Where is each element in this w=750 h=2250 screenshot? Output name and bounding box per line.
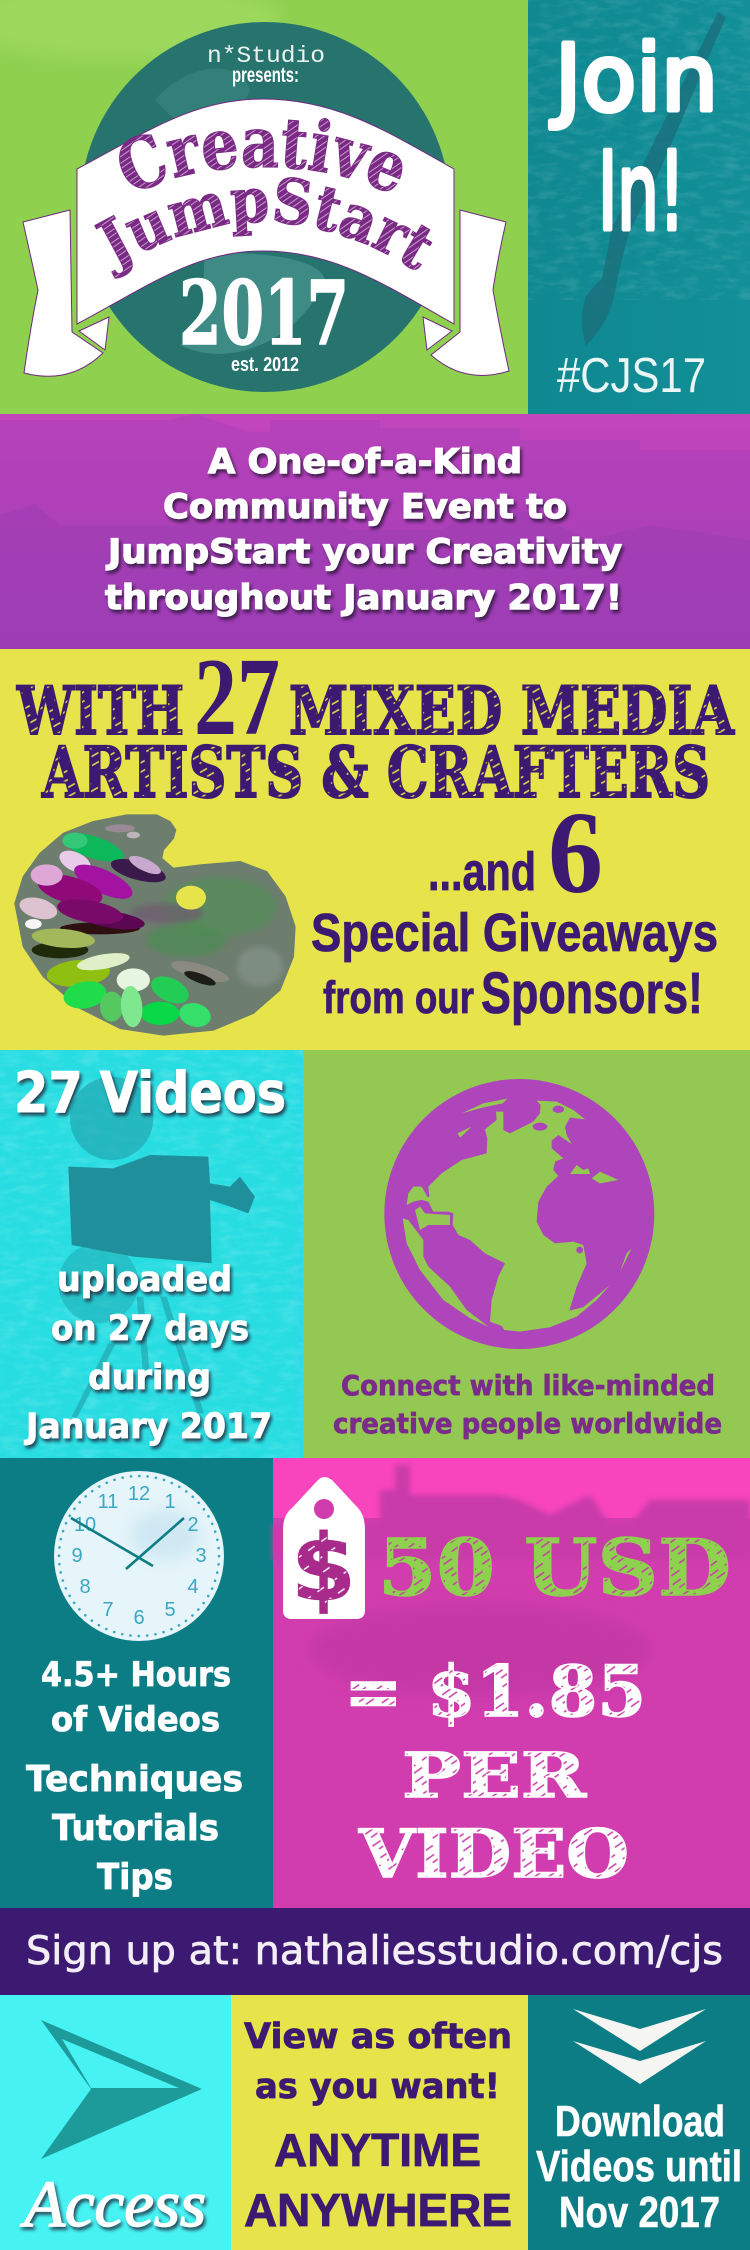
Join: Join bbox=[550, 25, 718, 132]
hours text bbox=[41, 1655, 231, 1740]
panel: logo on green bbox=[0, 0, 528, 414]
hashtag: #CJS17 bbox=[557, 349, 706, 403]
and: ...and bbox=[428, 842, 536, 902]
connect caption bbox=[333, 1369, 722, 1440]
download text: Nov 2017 bbox=[559, 2188, 720, 2237]
techniques list: Tips bbox=[97, 1857, 173, 1898]
icon: clock: 3 bbox=[195, 1545, 207, 1567]
techniques list: Tutorials bbox=[52, 1808, 219, 1849]
palette thumb hole bbox=[176, 886, 206, 910]
upload details: during bbox=[88, 1358, 211, 1398]
panel: access bbox=[0, 1995, 231, 2250]
techniques list: Techniques bbox=[26, 1759, 243, 1800]
icon: paintbrush bbox=[582, 12, 726, 346]
hours text: 4.5+ Hours bbox=[41, 1655, 231, 1695]
icon: double chevron bbox=[573, 2009, 706, 2084]
Access: Access bbox=[20, 2168, 206, 2241]
27 Videos: 27 Videos bbox=[14, 1061, 286, 1126]
icon: clock: 8 bbox=[79, 1576, 91, 1598]
globe circle bbox=[80, 22, 450, 392]
title: JumpStart: JumpStart bbox=[94, 177, 432, 279]
icon: clock: 7 bbox=[102, 1599, 114, 1621]
number 6: 6 bbox=[548, 787, 603, 918]
icon: arrow bbox=[41, 2020, 202, 2159]
icon: clock bbox=[54, 1471, 224, 1641]
est. 2012: est. 2012 bbox=[231, 354, 299, 376]
icon: clock: 6 bbox=[133, 1607, 145, 1629]
icon: clock: 11 bbox=[98, 1491, 118, 1513]
price per video: VIDEO bbox=[358, 1815, 629, 1893]
description text bbox=[105, 442, 622, 618]
n*Studio: n*Studio bbox=[207, 43, 325, 69]
icon: clock: 4 bbox=[187, 1576, 199, 1598]
icon: clock: 9 bbox=[71, 1545, 83, 1567]
banner tail left bbox=[23, 210, 103, 376]
icon: clock: 2 bbox=[187, 1514, 199, 1536]
hours text: of Videos bbox=[51, 1700, 220, 1740]
view text: as you want! bbox=[255, 2067, 500, 2107]
year 2017: 2017 bbox=[179, 261, 349, 365]
icon: clock: 12 bbox=[128, 1483, 150, 1505]
panel: Join In bbox=[528, 0, 750, 414]
techniques list bbox=[26, 1759, 243, 1898]
panel: sign up bar bbox=[0, 1908, 750, 1995]
description text: A One-of-a-Kind bbox=[208, 442, 522, 482]
view text bbox=[244, 2017, 512, 2107]
download text bbox=[536, 2097, 742, 2237]
panel: event description bbox=[0, 414, 750, 649]
panel: view as often bbox=[231, 1995, 528, 2250]
connect caption: creative people worldwide bbox=[333, 1407, 722, 1440]
icon: price tag bbox=[283, 1477, 365, 1622]
description text: Community Event to bbox=[163, 487, 567, 527]
anytime anywhere bbox=[244, 2124, 512, 2236]
panel: hours of videos bbox=[0, 1458, 273, 1908]
heading line one: WITH bbox=[16, 672, 184, 750]
price per video: PER bbox=[402, 1739, 587, 1812]
panel: download bbox=[528, 1995, 750, 2250]
banner tail right bbox=[431, 210, 509, 375]
banner fold right bbox=[423, 317, 452, 350]
icon: clock: 1 bbox=[164, 1491, 176, 1513]
upload details bbox=[24, 1260, 272, 1447]
upload details: uploaded bbox=[57, 1260, 232, 1300]
heading line one bbox=[16, 636, 735, 759]
icon: film camera bbox=[58, 1077, 255, 1418]
from our: from our bbox=[323, 972, 474, 1023]
icon: globe bbox=[384, 1079, 654, 1349]
In!: In! bbox=[598, 130, 685, 255]
banner main bbox=[77, 99, 454, 324]
anytime anywhere: ANYWHERE bbox=[244, 2184, 512, 2236]
icon: paint palette bbox=[15, 815, 295, 1035]
description text: JumpStart your Creativity bbox=[106, 532, 622, 572]
50 USD: 50 USD bbox=[378, 1523, 731, 1614]
heading line one: 27 bbox=[194, 636, 280, 759]
upload details: on 27 days bbox=[51, 1309, 249, 1349]
panel: connect worldwide bbox=[303, 1050, 750, 1458]
icon: clock: 5 bbox=[164, 1599, 176, 1621]
description text: throughout January 2017! bbox=[105, 578, 622, 618]
panel: artists and giveaways bbox=[0, 636, 750, 1050]
presents: presents: bbox=[232, 64, 299, 87]
panel: price bbox=[273, 1458, 750, 1908]
upload details: January 2017 bbox=[24, 1407, 272, 1447]
price per video bbox=[344, 1650, 646, 1893]
sign up link: Sign up at: nathaliesstudio.com/cjs bbox=[26, 1929, 723, 1974]
panel: 27 videos bbox=[0, 1050, 303, 1458]
connect caption: Connect with like-minded bbox=[341, 1369, 715, 1402]
banner fold left bbox=[79, 317, 109, 350]
icon: price tag: $ bbox=[291, 1515, 356, 1622]
icon: clock: 10 bbox=[74, 1514, 96, 1536]
anytime anywhere: ANYTIME bbox=[274, 2124, 481, 2176]
price per video: = $1.85 bbox=[344, 1650, 646, 1733]
title: Creative: Creative bbox=[119, 118, 402, 192]
view text: View as often bbox=[244, 2017, 512, 2057]
